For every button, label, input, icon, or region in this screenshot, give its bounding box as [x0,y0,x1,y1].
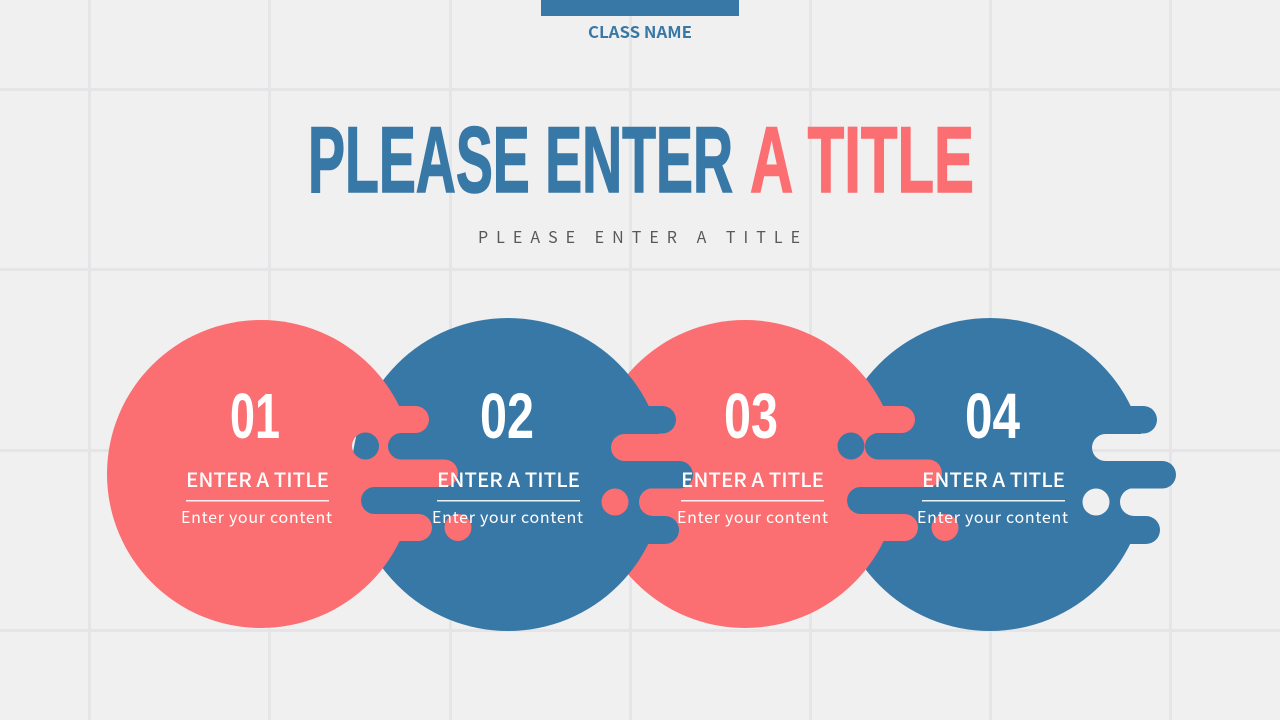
top bar [541,0,739,16]
step 04 text: Enter your content [917,504,1068,528]
step 01 text: ENTER A TITLE [186,464,329,493]
main title: A TITLE [750,107,974,212]
step 03 text: Enter your content [677,504,828,528]
step 03 text: 03 [724,380,778,452]
step 04 text [917,380,1068,528]
step 02 text: Enter your content [432,504,583,528]
step 03 text: ENTER A TITLE [681,464,824,493]
step 03 text [677,380,828,528]
circle 04 shape [834,318,1176,631]
class name label: CLASS NAME [588,19,692,43]
step 04 text: 04 [965,380,1020,452]
step 02 text [432,380,583,528]
circle 03 shape [591,320,958,628]
step 02 text: ENTER A TITLE [437,464,580,493]
step 04 text: ENTER A TITLE [922,464,1065,493]
circle 01 shape [107,320,472,628]
step 01 text [181,380,332,528]
step 01 text: Enter your content [181,504,332,528]
step 01 text: 01 [230,380,280,452]
circle 02 shape [352,318,693,631]
subtitle: PLEASE ENTER A TITLE [478,224,800,248]
step 02 text: 02 [480,380,534,452]
main title: PLEASE ENTER [308,107,733,212]
